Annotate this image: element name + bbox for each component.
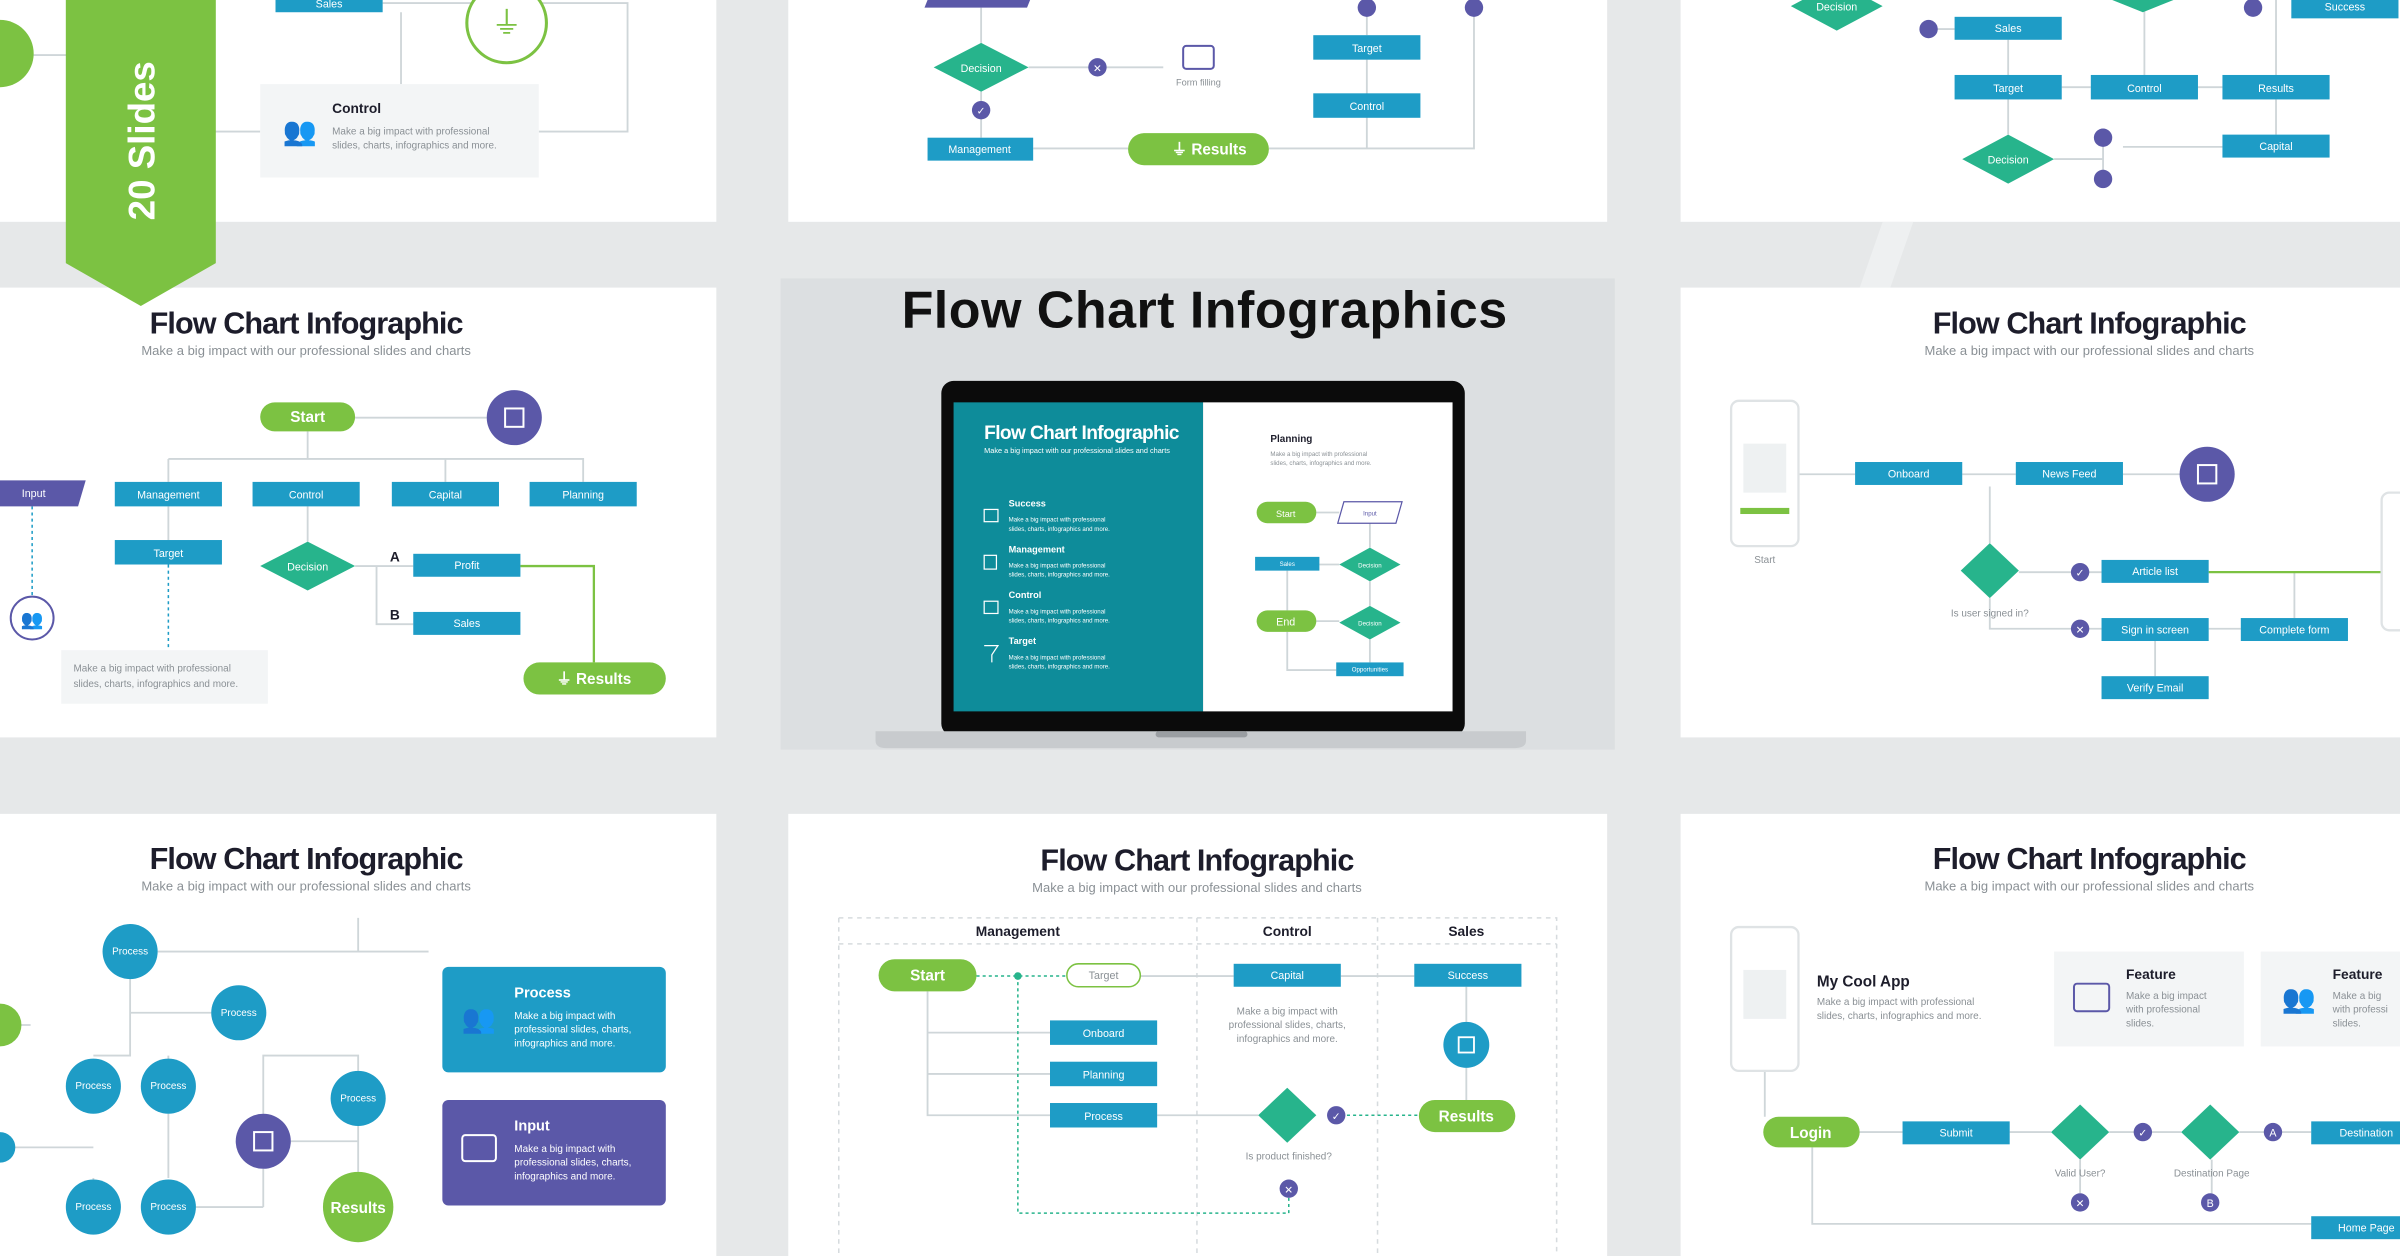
screen left text xyxy=(984,423,1180,671)
icon: A: A xyxy=(2269,1128,2277,1140)
pill: Login xyxy=(1763,1117,1860,1147)
icon: purple circle xyxy=(2180,447,2235,502)
icons: x / B xyxy=(2071,1193,2219,1212)
box: Target: Target xyxy=(153,548,183,560)
screen left text: Make a big impact with professional xyxy=(1009,563,1105,570)
box: Destination xyxy=(2311,1121,2400,1144)
box: Submit: Submit xyxy=(1939,1128,1973,1140)
box: Capital: Capital xyxy=(1271,970,1304,982)
text block: Control: Control xyxy=(332,101,381,116)
pill: Results xyxy=(523,662,666,695)
screen right flowchart: End xyxy=(1276,617,1295,629)
screen right flowchart: slides, charts, infographics and more. xyxy=(1270,460,1372,467)
screen left text: Control xyxy=(1009,590,1041,600)
box: Planning xyxy=(1050,1062,1157,1086)
pill: Start xyxy=(879,959,977,991)
box: Home Page: Home Page xyxy=(2338,1223,2395,1235)
labels A B: A xyxy=(390,549,400,564)
text block: Control: 👥 xyxy=(283,116,317,148)
card: Feature 1: slides. xyxy=(2126,1019,2154,1030)
column headers: Management xyxy=(976,924,1060,939)
shape: Input: Input xyxy=(22,488,46,500)
card: Feature 1: Make a big impact xyxy=(2126,991,2207,1002)
box: Control: Control xyxy=(1350,101,1384,113)
diamond: finished xyxy=(1246,1088,1332,1163)
icons: check / x: ✕ xyxy=(1284,1184,1293,1196)
icons: check and x xyxy=(1358,0,1483,17)
text block xyxy=(61,650,268,704)
card: Feature 2: Feature xyxy=(2333,967,2383,982)
icon: check circle xyxy=(972,101,990,119)
text block: Control: slides, charts, infographics and more. xyxy=(332,140,497,151)
heading xyxy=(1032,843,1362,895)
icon: form filling xyxy=(1176,46,1221,88)
shape: input parallelogram xyxy=(924,0,1033,8)
icons: check / x xyxy=(2071,563,2089,638)
phone: Start: Start xyxy=(1754,555,1776,566)
text block: Control: Make a big impact with professional xyxy=(332,127,490,138)
screen right flowchart: Sales xyxy=(1280,561,1295,568)
phone: Start xyxy=(1731,401,1798,566)
heading: Flow Chart Infographic xyxy=(150,842,464,876)
panel: center hero xyxy=(781,278,1615,750)
box: Target xyxy=(115,540,222,565)
box: Process xyxy=(1050,1103,1157,1127)
icons: check / x: ✓ xyxy=(1332,1111,1341,1123)
icon: purple circle xyxy=(487,390,542,445)
icon: x circle xyxy=(1088,58,1107,76)
text: My Cool App: slides, charts, infographics and more. xyxy=(1817,1011,1981,1022)
box: Target: Target xyxy=(1352,43,1382,55)
box: Capital xyxy=(2222,135,2330,158)
screen right flowchart: Decision xyxy=(1358,563,1382,570)
box: Sign in screen xyxy=(2102,618,2209,641)
box: Control xyxy=(1313,93,1420,118)
card: bottom-left slide: Process xyxy=(112,947,148,958)
icon: A xyxy=(2264,1123,2282,1141)
pill: Results: ⏚ Results xyxy=(1172,142,1247,159)
heading: Make a big impact with our professional slides and charts xyxy=(1924,343,2255,358)
screen left text: Target xyxy=(1009,636,1036,646)
circle: Results xyxy=(323,1172,393,1242)
card: bottom-left slide: Process xyxy=(221,1008,257,1019)
card: Process: infographics and more. xyxy=(514,1038,615,1049)
text block: professional slides, charts, xyxy=(1229,1020,1346,1031)
box: Profit xyxy=(413,554,520,577)
screen left text: slides, charts, infographics and more. xyxy=(1009,664,1110,671)
phone xyxy=(1731,927,1798,1071)
box: Capital: Capital xyxy=(2259,141,2293,153)
screen right flowchart: Start xyxy=(1276,509,1296,519)
card: Feature 2: 👥 xyxy=(2282,983,2316,1015)
card: bottom-left slide: Process xyxy=(150,1202,186,1213)
screen left text: Flow Chart Infographic xyxy=(984,423,1180,444)
column headers: Sales xyxy=(1448,924,1485,939)
icons: check / x xyxy=(1280,1106,1345,1198)
box: Target: Target xyxy=(1993,83,2023,95)
icons: x / B: ✕ xyxy=(2076,1198,2085,1210)
box: Onboard: Onboard xyxy=(1083,1028,1124,1040)
card: Input: Make a big impact with xyxy=(514,1144,615,1155)
diamond: Destination Page: Destination Page xyxy=(2174,1168,2250,1179)
box: Management xyxy=(115,482,222,506)
box: Profit: Profit xyxy=(454,560,479,572)
box: Planning xyxy=(530,482,637,506)
screen left text: Make a big impact with professional xyxy=(1009,654,1105,661)
card: Input: professional slides, charts, xyxy=(514,1158,631,1169)
title: Flow Chart Infographics xyxy=(902,281,1508,339)
card: Process: 👥 xyxy=(462,1003,496,1035)
box: Planning: Planning xyxy=(562,490,604,502)
box: Destination: Destination xyxy=(2340,1128,2393,1140)
heading: Flow Chart Infographic xyxy=(150,307,464,341)
pill: Start: Start xyxy=(290,409,325,426)
heading: Make a big impact with our professional slides and charts xyxy=(141,878,471,893)
pill: Results xyxy=(1419,1100,1515,1132)
text block: infographics and more. xyxy=(1237,1034,1338,1045)
box: Sales xyxy=(276,0,383,12)
icon: people circle xyxy=(11,597,54,639)
text block xyxy=(1229,1006,1346,1045)
box: Success xyxy=(1414,964,1521,987)
screen left text: Make a big impact with our professional slides and charts xyxy=(984,446,1170,455)
heading xyxy=(1924,842,2255,893)
screen left text: Success xyxy=(1009,498,1046,508)
card: Feature 2: with professi xyxy=(2332,1005,2388,1016)
box: Submit xyxy=(1903,1121,2010,1144)
heading: Flow Chart Infographic xyxy=(1933,307,2247,341)
screen right flowchart: Planning xyxy=(1270,434,1312,445)
labels A B: B xyxy=(390,608,400,623)
heading xyxy=(1924,307,2255,358)
green circles partial xyxy=(0,1004,21,1163)
diamond: Decision xyxy=(260,542,355,591)
icons: x circles xyxy=(1919,0,2262,188)
screen left text: Make a big impact with professional xyxy=(1009,517,1105,524)
icon: form filling: Form filling xyxy=(1176,78,1221,88)
card: bottom-middle slide xyxy=(788,814,1607,1256)
pill: Login: Login xyxy=(1790,1125,1832,1142)
diamond: partial xyxy=(2112,0,2173,12)
column headers xyxy=(976,924,1485,939)
heading: Flow Chart Infographic xyxy=(1933,842,2247,876)
box: Management: Management xyxy=(948,144,1011,156)
screen left text: slides, charts, infographics and more. xyxy=(1009,526,1110,533)
screen right flowchart: Decision xyxy=(1358,621,1382,628)
ribbon: 20 Slides: 20 Slides xyxy=(122,61,163,220)
heading: Flow Chart Infographic xyxy=(1040,843,1354,877)
pill: Results: ⏚ Results xyxy=(556,671,631,688)
card: bottom-left slide: Process xyxy=(340,1093,376,1104)
pill: Target outline: Target xyxy=(1089,970,1118,982)
box: Results: Results xyxy=(2258,83,2294,95)
icons: check / x: ✕ xyxy=(2076,624,2085,636)
card: Process: professional slides, charts, xyxy=(514,1025,631,1036)
card: Process: Process xyxy=(514,985,571,1001)
card: Input xyxy=(442,1100,666,1206)
shape: Input xyxy=(0,480,86,506)
box: Article list: Article list xyxy=(2132,566,2178,578)
box: Article list xyxy=(2102,560,2209,583)
icon: x circle: ✕ xyxy=(1093,63,1102,75)
box: Results xyxy=(2222,75,2330,99)
screen right flowchart xyxy=(1255,434,1404,676)
box: Planning: Planning xyxy=(1083,1070,1124,1082)
text: My Cool App: My Cool App xyxy=(1817,974,1910,991)
box: Success: Success xyxy=(1448,970,1488,982)
card: Feature 1 xyxy=(2054,952,2244,1046)
screen left text: slides, charts, infographics and more. xyxy=(1009,572,1110,579)
card: top-middle slide xyxy=(788,0,1607,222)
icon: teal circle xyxy=(1443,1022,1489,1068)
ribbon: 20 Slides xyxy=(66,0,216,306)
heading xyxy=(141,307,471,358)
box: Verify Email: Verify Email xyxy=(2127,682,2183,694)
box: News Feed: News Feed xyxy=(2042,468,2097,480)
icon: purple circle xyxy=(236,1114,291,1169)
pill: Start xyxy=(260,402,355,431)
card: bottom-left slide: Process xyxy=(150,1081,186,1092)
heading: Make a big impact with our professional slides and charts xyxy=(141,343,471,358)
icon: funnel circle: ⏚ xyxy=(491,7,522,41)
card: bottom-left slide: Process xyxy=(75,1081,111,1092)
text block: Control xyxy=(260,84,539,177)
diamond: Decision: Decision xyxy=(287,562,328,574)
text: My Cool App xyxy=(1817,974,1981,1022)
box: Sales xyxy=(413,612,520,635)
screen left text: Management xyxy=(1009,544,1065,554)
laptop xyxy=(876,381,1526,748)
pill: Start: Start xyxy=(910,968,945,985)
screen left text: Make a big impact with professional xyxy=(1009,608,1105,615)
diamond: Valid User xyxy=(2051,1105,2109,1179)
box: Capital: Capital xyxy=(429,490,462,502)
card: bottom-right slide xyxy=(1681,814,2400,1256)
diamond: Destination Page xyxy=(2174,1105,2250,1179)
screen right flowchart: Input xyxy=(1363,511,1377,518)
icon: check: ✓ xyxy=(2138,1128,2147,1140)
box: Onboard xyxy=(1050,1020,1157,1045)
labels A B xyxy=(390,549,400,623)
screen right flowchart: Make a big impact with professional xyxy=(1270,451,1367,458)
pill: Results: Results xyxy=(1439,1108,1494,1125)
circle: Results: Results xyxy=(331,1200,386,1217)
box: Home Page xyxy=(2311,1216,2400,1239)
text block: Make a big impact with xyxy=(1237,1006,1338,1017)
diamond: Decision: Decision xyxy=(961,63,1002,75)
box: Sales xyxy=(1955,17,2062,40)
heading: Make a big impact with our professional slides and charts xyxy=(1032,880,1362,895)
card: Input: infographics and more. xyxy=(514,1172,615,1183)
diamond: signed in xyxy=(1951,543,2029,620)
box: News Feed xyxy=(2016,462,2123,485)
diamond: Decision xyxy=(1962,135,2054,184)
icon: green circle partial xyxy=(0,20,34,87)
box: Capital xyxy=(1234,964,1341,987)
card: Process: Make a big impact with xyxy=(514,1011,615,1022)
pill: Results xyxy=(1128,133,1269,165)
text block: Make a big impact with professional xyxy=(73,664,231,675)
column headers: Control xyxy=(1263,924,1312,939)
box: Target xyxy=(1313,35,1420,60)
box: Management xyxy=(928,138,1033,161)
box: Complete form: Complete form xyxy=(2259,624,2330,636)
box: Capital xyxy=(392,482,499,506)
diamond: Decision xyxy=(934,43,1029,92)
box: Control: Control xyxy=(289,490,323,502)
card: bottom-left slide xyxy=(0,814,716,1256)
diamond: Decision top xyxy=(1791,0,1883,31)
icons: check / x: ✓ xyxy=(2076,568,2085,580)
box: Control: Control xyxy=(2127,83,2162,95)
card: Feature 1: with professional xyxy=(2125,1005,2200,1016)
icons: x / B: B xyxy=(2207,1198,2214,1210)
box: Process: Process xyxy=(1084,1111,1123,1123)
diamond: Valid User: Valid User? xyxy=(2055,1168,2106,1179)
card: middle-right slide xyxy=(1681,288,2400,737)
diamond: Decision: Decision xyxy=(1988,155,2029,167)
heading xyxy=(141,842,471,893)
process circles xyxy=(66,924,386,1235)
box: Sales: Sales xyxy=(1995,23,2022,35)
diamond: finished: Is product finished? xyxy=(1246,1152,1332,1163)
box: Control xyxy=(253,482,360,506)
box: Onboard xyxy=(1855,462,1962,485)
icon: funnel circle xyxy=(467,0,546,63)
screen left text: slides, charts, infographics and more. xyxy=(1009,618,1110,625)
icon: check circle: ✓ xyxy=(977,106,986,118)
card: Feature 2: Make a big xyxy=(2333,991,2381,1002)
box: Management: Management xyxy=(137,490,200,502)
card: bottom-left slide: Process xyxy=(75,1202,111,1213)
card: Process xyxy=(442,967,666,1072)
card: Feature 2 xyxy=(2261,952,2400,1046)
box: Target xyxy=(1955,75,2062,99)
phone partial xyxy=(2382,493,2400,630)
heading: Make a big impact with our professional slides and charts xyxy=(1924,878,2255,893)
card: top-right slide xyxy=(1681,0,2400,288)
diamond: signed in: Is user signed in? xyxy=(1951,609,2029,620)
card: Feature 2: slides. xyxy=(2333,1019,2361,1030)
card: Feature 1: Feature xyxy=(2126,967,2176,982)
box: Onboard: Onboard xyxy=(1888,468,1930,480)
box: Success: Success xyxy=(2325,2,2365,14)
box: Verify Email xyxy=(2102,676,2209,699)
icon: people circle: 👥 xyxy=(21,609,44,631)
screen right flowchart: Opportunities xyxy=(1352,667,1388,674)
diamond: Decision top: Decision xyxy=(1816,2,1857,14)
box: Success xyxy=(2291,0,2398,18)
text block: slides, charts, infographics and more. xyxy=(73,679,238,690)
box: Control xyxy=(2091,75,2198,99)
text: My Cool App: Make a big impact with professional xyxy=(1817,997,1974,1008)
box: Complete form xyxy=(2241,618,2348,641)
box: Sales: Sales xyxy=(453,618,480,630)
card: Input: Input xyxy=(514,1119,550,1135)
card: middle-left slide xyxy=(0,288,716,737)
pill: Target outline xyxy=(1067,964,1140,987)
card: top-left slide xyxy=(0,0,716,222)
icon: check xyxy=(2134,1123,2152,1141)
box: Sign in screen: Sign in screen xyxy=(2121,624,2189,636)
